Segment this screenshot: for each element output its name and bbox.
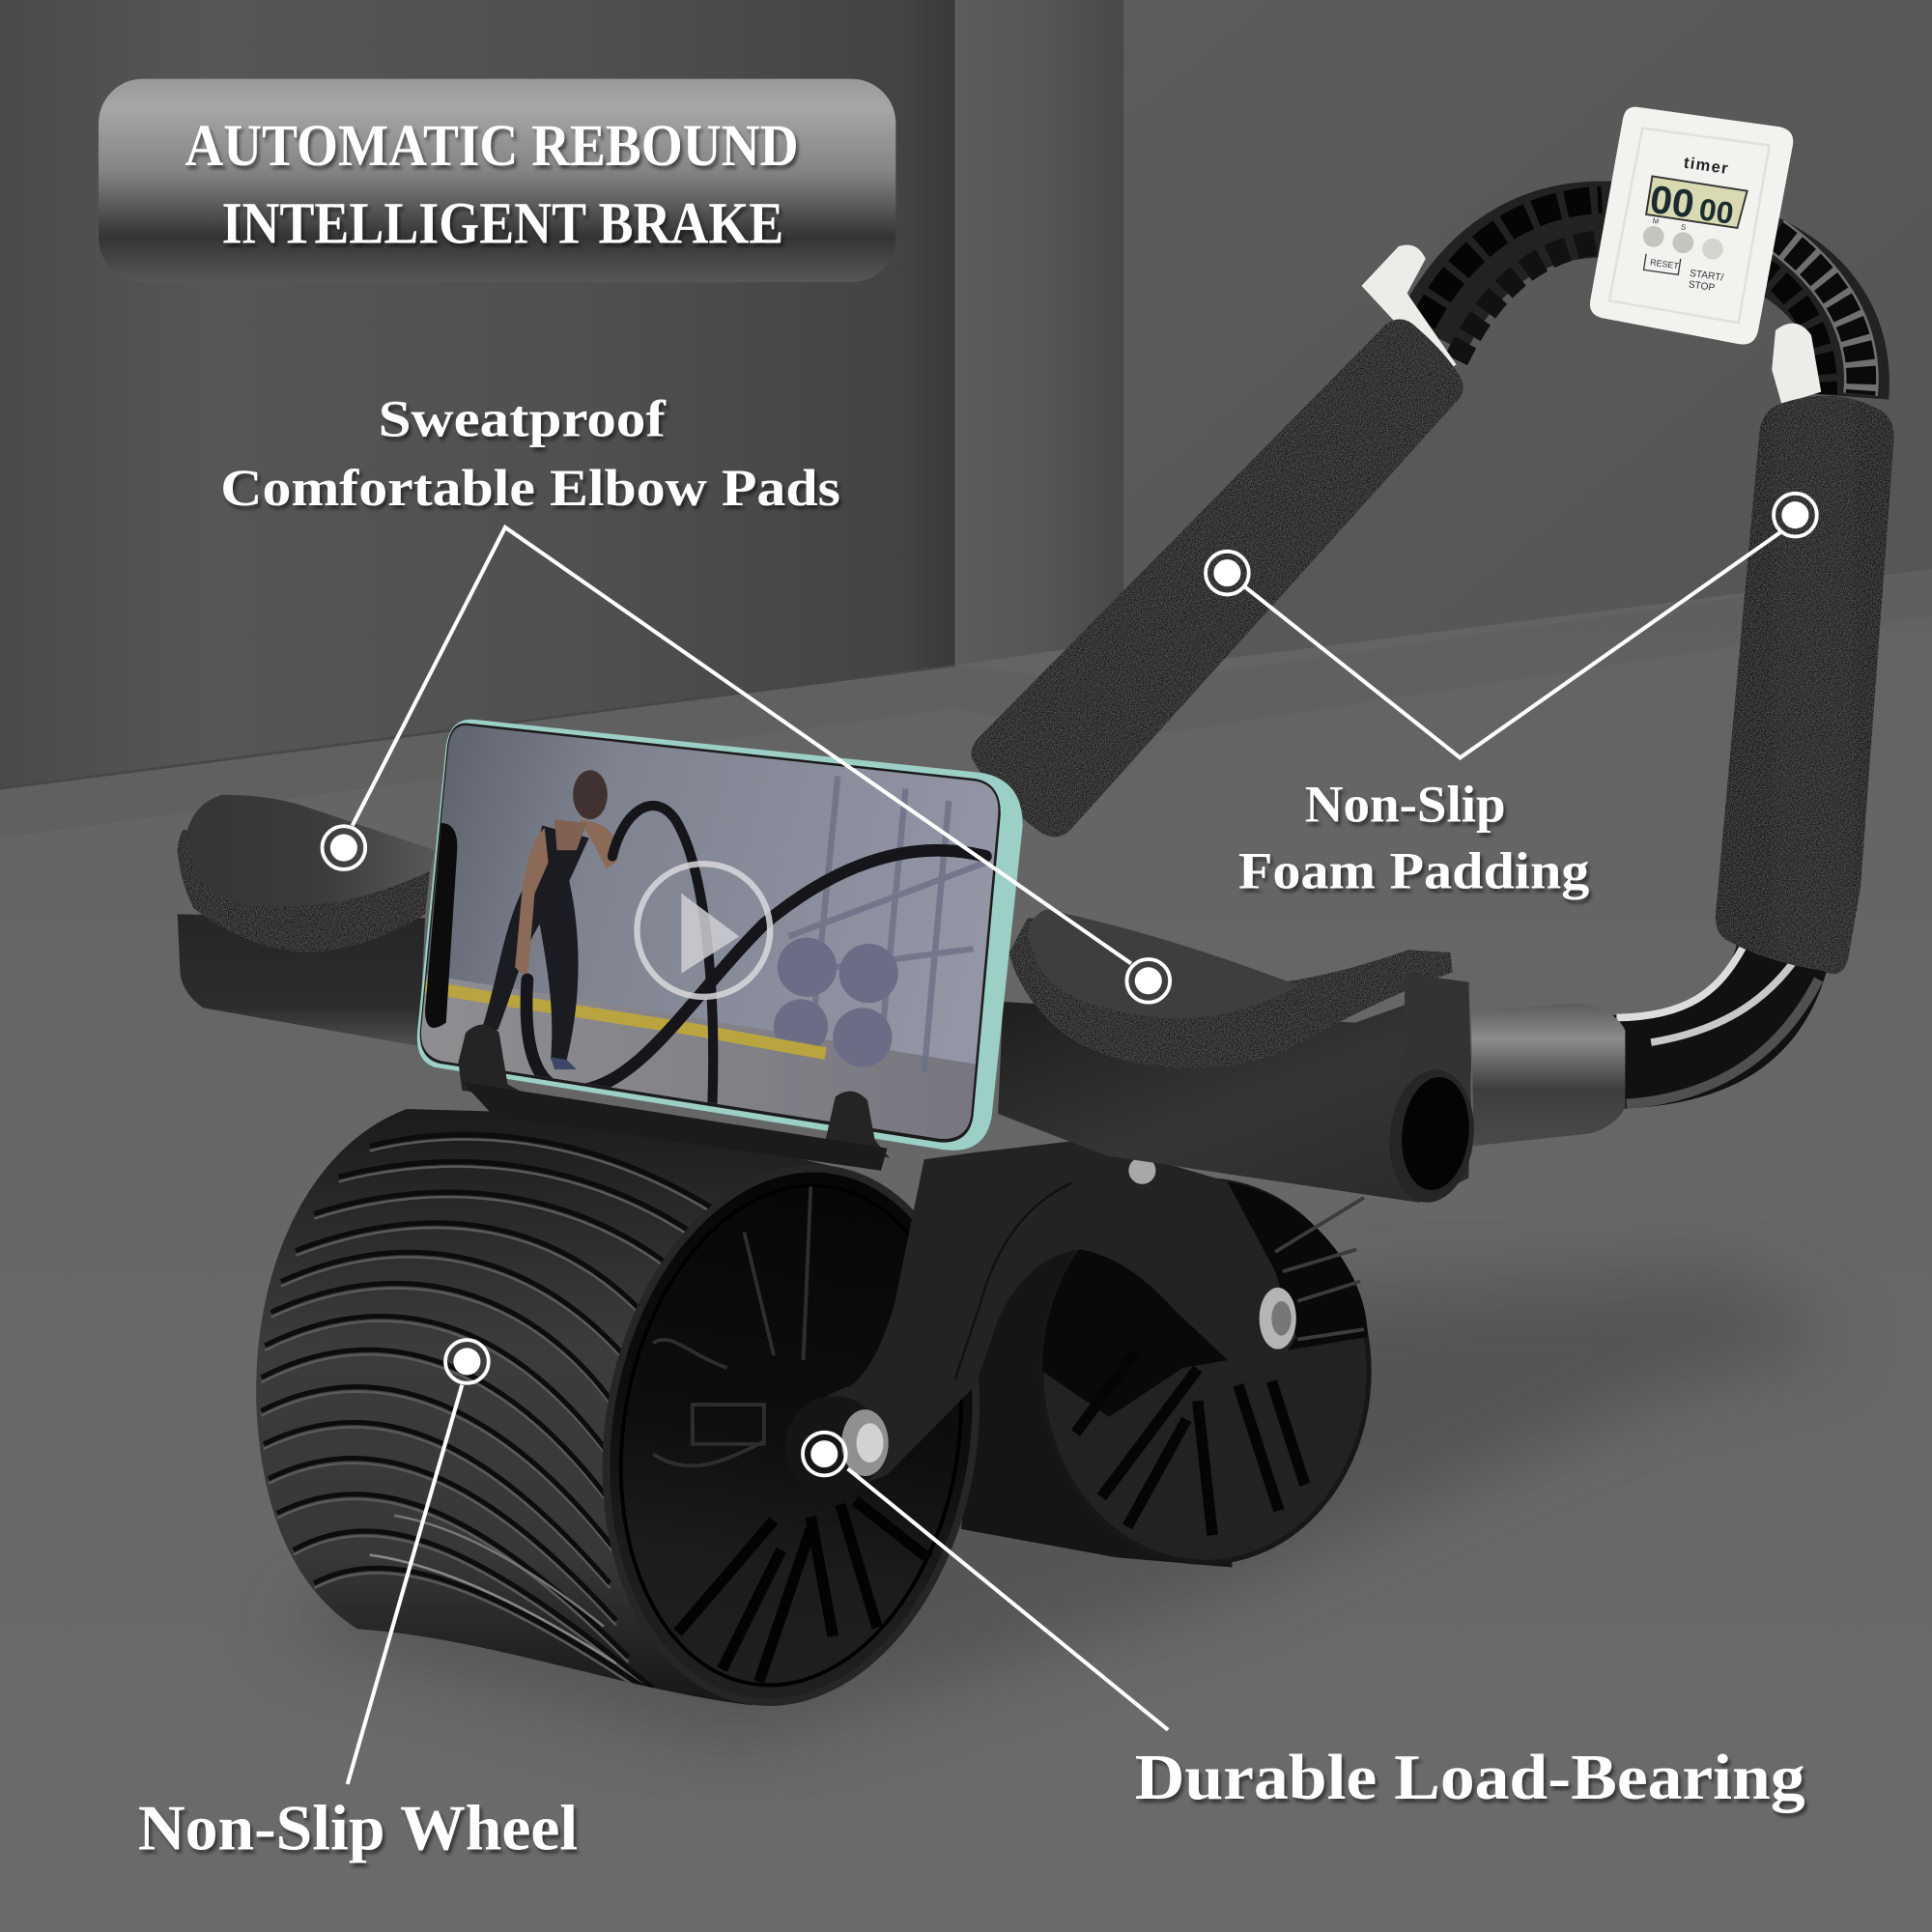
label: elbow pads: Comfortable Elbow Pads: [220, 459, 840, 517]
phone: [407, 715, 1023, 1171]
axle bolt front: [841, 1409, 889, 1476]
timer label: timer: [1683, 154, 1729, 178]
timer: [1590, 107, 1793, 345]
marker: elbow pad left: [323, 826, 365, 869]
yellow floor line: [419, 985, 826, 1054]
foam handle left: [972, 320, 1463, 837]
title text: AUTOMATIC REBOUND: [185, 113, 799, 179]
notch: [425, 823, 457, 1028]
marker: axle: [803, 1433, 846, 1475]
small stud: [1128, 1157, 1155, 1184]
tread ridges: [260, 1132, 712, 1689]
phone screen video: [421, 725, 999, 1139]
marker: foam right: [1774, 494, 1817, 536]
label: wheel: Non-Slip Wheel: [138, 1794, 578, 1864]
play button: [637, 864, 770, 997]
phone clips: [458, 1025, 890, 1171]
title text: [185, 113, 799, 256]
timer buttons text: [1650, 216, 1724, 294]
label: foam padding: Foam Padding: [1238, 842, 1590, 900]
timer buttons text: STOP: [1688, 279, 1716, 294]
floor shadow beneath wheels: [271, 1269, 1848, 1749]
handle lower tube: [1471, 939, 1819, 1146]
timer digits: [1647, 177, 1736, 231]
front wheel face: [569, 1142, 1013, 1729]
timer buttons text: START/: [1689, 269, 1724, 284]
label: foam padding: Non-Slip: [1305, 776, 1506, 834]
wheel arm: [784, 1140, 1296, 1494]
marker: foam left: [1206, 552, 1249, 594]
title text: INTELLIGENT BRAKE: [222, 190, 783, 256]
timer buttons text: RESET: [1650, 257, 1680, 270]
athlete: [483, 770, 617, 1069]
timer buttons text: M: [1652, 216, 1660, 226]
foam handle right: [1716, 396, 1894, 974]
battle ropes: [526, 806, 985, 1109]
white clips: [1361, 245, 1821, 404]
timer buttons text: S: [1681, 222, 1687, 232]
label: load bearing: Durable Load-Bearing: [1135, 1743, 1805, 1813]
back wheel: [961, 1180, 1369, 1567]
label: elbow pads: [220, 390, 840, 517]
timer digits: 00: [1697, 191, 1736, 231]
label: foam padding: [1238, 776, 1590, 900]
front wheel tread: [256, 1109, 850, 1723]
title pill: [99, 79, 895, 282]
left elbow pad: [178, 795, 435, 1046]
callout lines: [348, 527, 1780, 1784]
handle sleeve: [1471, 1003, 1625, 1146]
timer digits: 00: [1647, 177, 1697, 227]
axle bolt rear: [1243, 1285, 1296, 1354]
weight plates: [774, 938, 898, 1067]
marker: wheel: [445, 1340, 489, 1383]
right elbow pad: [998, 909, 1480, 1207]
marker: elbow pad right: [1126, 959, 1170, 1003]
handle ribbed grip arch: [1423, 200, 1861, 397]
label: elbow pads: Sweatproof: [379, 390, 667, 448]
